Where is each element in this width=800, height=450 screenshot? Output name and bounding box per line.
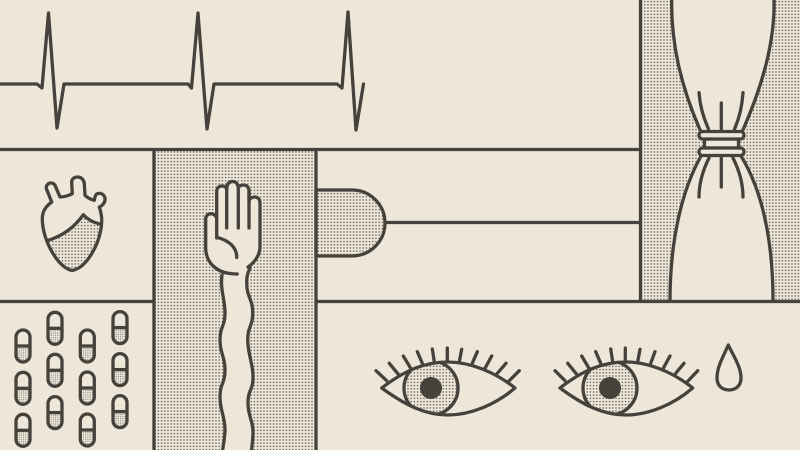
panel: dotted curtain column: [641, 0, 800, 301]
ties: [704, 139, 738, 148]
heart dividing line: [48, 215, 100, 240]
icon: raised hand and arm: [206, 182, 260, 450]
pill: [113, 312, 127, 344]
pill: [16, 330, 30, 362]
heartbeat line: [0, 12, 364, 130]
pill: [16, 414, 30, 446]
pill: [113, 354, 127, 386]
heart lower shading: [48, 215, 100, 270]
pill: [113, 396, 127, 428]
pill: [48, 354, 62, 386]
icon: pills: [16, 312, 127, 446]
arm left edge: [220, 275, 225, 450]
lower folds: [699, 158, 743, 197]
eyelids: [382, 362, 515, 415]
iris: [404, 361, 458, 415]
icon: capsule connector: [316, 190, 640, 256]
pill: [80, 330, 94, 362]
finger separators and thumb crease: [217, 189, 249, 258]
arm fill: [220, 266, 253, 450]
pill: [48, 312, 62, 344]
eyelashes: [376, 348, 519, 382]
icon: tied curtain: [670, 0, 774, 301]
iris: [583, 361, 637, 415]
icon: right eye: [555, 348, 698, 415]
hand fill: [206, 182, 260, 274]
pupil: [420, 377, 442, 399]
heart outline: [42, 177, 105, 270]
eyelids: [560, 362, 693, 415]
pill: [80, 372, 94, 404]
curtain shape: [670, 0, 774, 301]
panel: dotted arm column: [154, 149, 316, 450]
connecting line: [386, 221, 640, 224]
icon: tear drop: [717, 345, 741, 390]
half capsule: [316, 190, 385, 256]
eyelashes: [555, 348, 698, 382]
pill: [80, 414, 94, 446]
pill: [16, 372, 30, 404]
upper folds: [699, 93, 743, 129]
arm right edge: [247, 268, 253, 450]
hand outline: [206, 182, 260, 274]
pupil: [599, 377, 621, 399]
icon: left eye: [376, 348, 519, 415]
icon: heart: [42, 177, 105, 270]
pill: [48, 397, 62, 429]
